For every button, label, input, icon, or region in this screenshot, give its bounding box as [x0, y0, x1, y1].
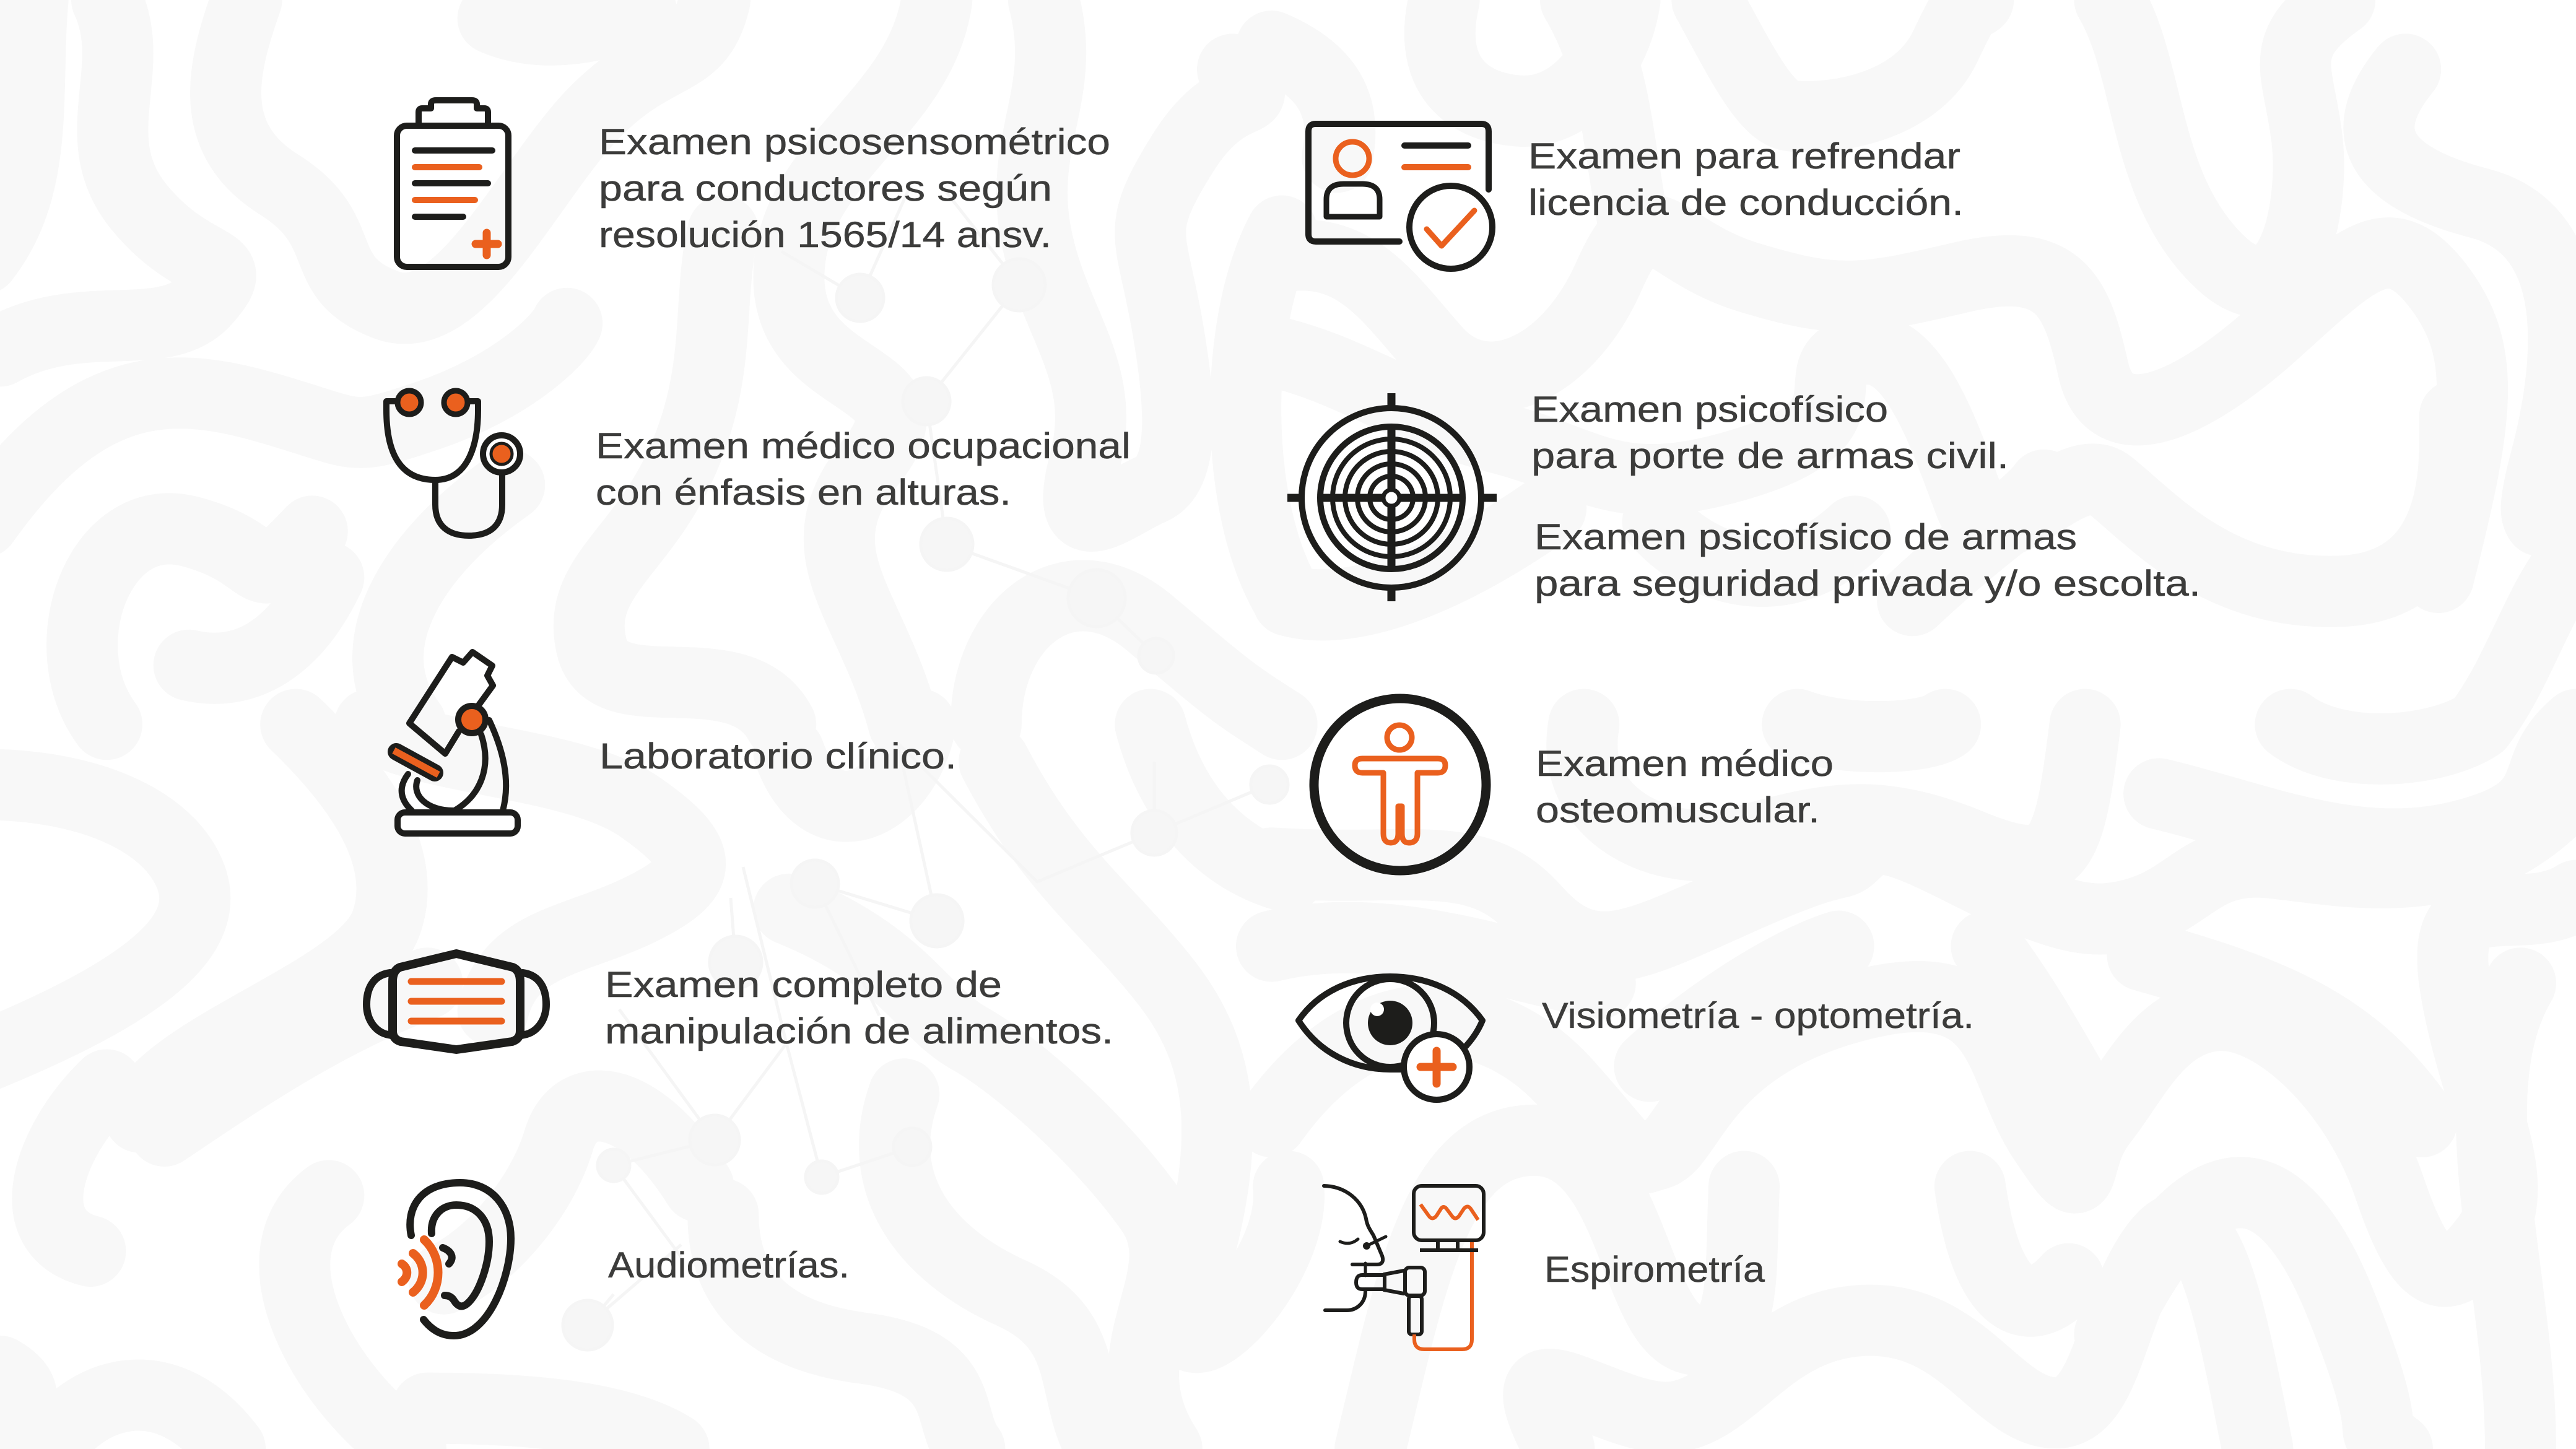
text: manipulación de alimentos: manipulación de alimentos. — [605, 1011, 1113, 1051]
item: psicosensométrico — [397, 100, 1110, 267]
icon: spirometer — [1324, 1186, 1484, 1349]
icon: ear with sound waves — [402, 1183, 511, 1336]
text: manipulación de alimentos: Examen completo de — [605, 965, 1002, 1005]
item: visiometría — [1299, 977, 1974, 1100]
item: manipulación de alimentos — [367, 954, 1113, 1051]
text: laboratorio: Laboratorio clínico. — [599, 736, 957, 777]
item: armas — [1287, 389, 2201, 604]
icon: body in circle — [1314, 698, 1486, 871]
text: médico ocupacional: con énfasis en alturas. — [596, 472, 1011, 513]
item: osteomuscular — [1314, 698, 1834, 871]
text: seguridad privada — [1534, 517, 2201, 604]
text: visiometría: Visiometría - optometría. — [1542, 996, 1974, 1036]
text: refrendar licencia — [1528, 136, 1964, 223]
icon: clipboard — [397, 100, 508, 267]
text: porte de armas civil: para porte de armas civil. — [1531, 436, 2009, 476]
item: espirometría — [1324, 1186, 1765, 1349]
text: seguridad privada: Examen psicofísico de armas — [1534, 517, 2077, 557]
icon: id card with check — [1308, 124, 1492, 269]
text: psicosensométrico — [599, 122, 1110, 255]
icon: eye with plus — [1299, 977, 1482, 1100]
item: médico ocupacional — [386, 391, 1131, 536]
text: osteomuscular: Examen médico — [1536, 744, 1834, 784]
icon: target — [1287, 393, 1497, 601]
text: porte de armas civil — [1531, 389, 2009, 476]
background: faint molecule network — [563, 186, 1288, 1350]
item: laboratorio — [394, 652, 957, 833]
text: manipulación de alimentos — [605, 965, 1113, 1051]
item: refrendar licencia — [1308, 124, 1964, 269]
item: audiometrías — [402, 1183, 850, 1336]
text: psicosensométrico: resolución 1565/14 ansv. — [599, 215, 1051, 255]
text: audiometrías: Audiometrías. — [608, 1245, 850, 1286]
text: seguridad privada: para seguridad privada y/o escolta. — [1534, 564, 2201, 604]
text: osteomuscular — [1536, 744, 1834, 830]
text: médico ocupacional — [596, 426, 1131, 513]
text: médico ocupacional: Examen médico ocupacional — [596, 426, 1131, 466]
text: espirometría: Espirometría — [1544, 1250, 1765, 1290]
text: osteomuscular: osteomuscular. — [1536, 790, 1820, 830]
icon: microscope — [394, 652, 518, 833]
text: refrendar licencia: licencia de conducción. — [1528, 183, 1964, 223]
text: porte de armas civil: Examen psicofísico — [1531, 389, 1888, 430]
text: psicosensométrico: Examen psicosensométrico — [599, 122, 1110, 162]
text: refrendar licencia: Examen para refrendar — [1528, 136, 1960, 176]
text: psicosensométrico: para conductores según — [599, 168, 1052, 209]
icon: face mask — [367, 954, 546, 1050]
icon: stethoscope — [386, 391, 520, 536]
